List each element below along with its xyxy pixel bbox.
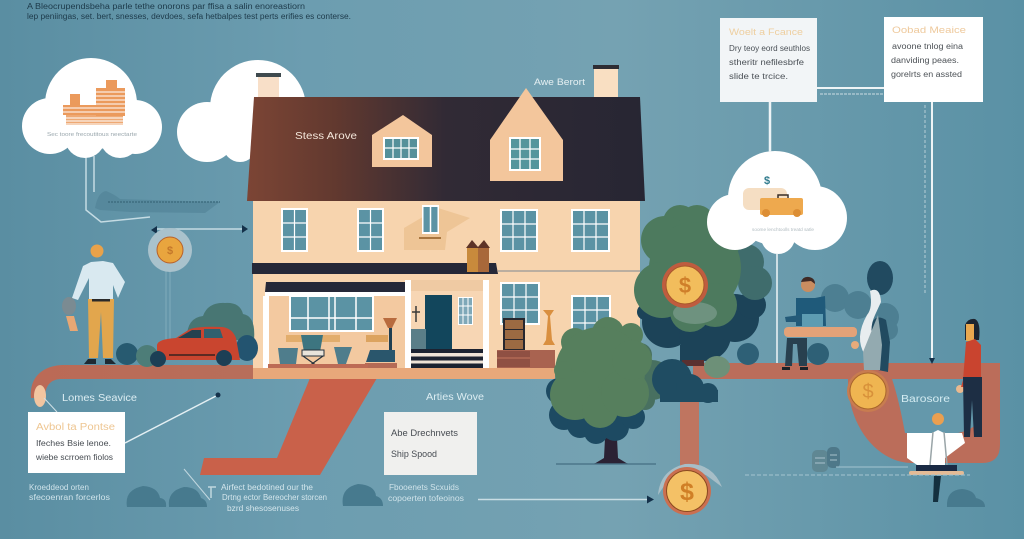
- trousers: [88, 299, 114, 358]
- note: lower left: [29, 483, 110, 502]
- window: upper 5: [571, 209, 610, 252]
- coin: bottom: $: [680, 478, 694, 506]
- callout: top middle: [720, 18, 817, 102]
- header text: lep peniingas, set. bert, snesses, devdoes, sefa hetbalpes test perts erifies es conterse.: [27, 12, 351, 21]
- bushes: under cloud: [704, 343, 829, 378]
- chimney: right: [593, 65, 619, 107]
- note: lower left: Kroeddeod orten: [29, 483, 89, 492]
- arrowhead: down: [929, 358, 935, 364]
- arrow: callout to top right: [125, 392, 220, 443]
- dormer: small: [372, 115, 432, 167]
- porch awning: [265, 282, 406, 292]
- house base: [253, 368, 555, 379]
- callout: lower centre: Ship Spood: [391, 449, 437, 459]
- shrubs: left: [116, 335, 258, 367]
- icon: small stones: [812, 447, 840, 472]
- door: [411, 295, 452, 350]
- callout: top right: Oobad Meaice: [892, 25, 966, 36]
- coin: left: [148, 228, 192, 348]
- note: lower centre: [388, 483, 464, 503]
- cloud caption: Sec toore frecoutitous neectarte: [47, 132, 137, 138]
- callout: lower centre: Abe Drechnvets: [391, 428, 459, 438]
- coin: in tree: $: [679, 273, 691, 298]
- label: lower left: Lomes Seavice: [62, 392, 137, 404]
- porch roof: [252, 263, 498, 274]
- porch window: [289, 296, 374, 332]
- note: lower middle: Drtng ector Bereocher storcen: [222, 493, 327, 502]
- callout: top middle: Woelt a Fcance: [729, 27, 803, 37]
- cloud icon: bottom right: [947, 489, 985, 507]
- note: lower centre: copoerten tofeoinos: [388, 494, 464, 503]
- label: lower centre: Arties Wove: [426, 391, 484, 403]
- belt: [92, 299, 110, 302]
- header text: A Bleocrupendsbeha parle tethe onorons par ffisa a salin enoreastiorn: [27, 2, 305, 11]
- dollar label: $: [764, 175, 770, 187]
- person: seated man: [782, 277, 826, 370]
- coin: left: $: [167, 245, 173, 257]
- callout: top right: gorelrts en assted: [891, 70, 962, 79]
- arrow: coin to house: [151, 225, 248, 234]
- porch posts: [263, 280, 489, 368]
- cloud: behind house: [177, 60, 306, 162]
- roof: [247, 97, 645, 201]
- window: upper 2: [357, 208, 384, 252]
- callout: lower left: [28, 412, 125, 473]
- porch furniture: [268, 318, 397, 368]
- callout: lower left: wiebe scrroem fiolos: [35, 452, 113, 462]
- callout: top middle: Dry teoy eord seuthlos: [729, 44, 810, 53]
- vertical path: [680, 400, 699, 466]
- person: man at desk: [907, 413, 965, 502]
- head: [90, 244, 104, 258]
- door side window: [458, 297, 473, 325]
- window: upper 4: [500, 209, 538, 252]
- shirt: [72, 261, 125, 300]
- diagonal orange path: [200, 378, 377, 475]
- pointer: small: [184, 469, 216, 500]
- cloud caption: soome lenchtoolls treatd satle: [752, 227, 815, 232]
- note: lower centre: Fbooenets Scxuids: [389, 483, 459, 492]
- cloud: suitcase: [707, 151, 847, 254]
- note: lower middle: bzrd shesosenuses: [227, 504, 299, 513]
- vase: [543, 310, 555, 345]
- tree: back: [634, 205, 772, 366]
- coin: in tree: [662, 262, 708, 308]
- arrow: bottom to coin: [478, 496, 654, 504]
- bushes: behind figure: [821, 284, 899, 340]
- label: right path: Barosore: [901, 394, 951, 405]
- tree: front: [546, 317, 672, 464]
- connector: small to box: [44, 398, 57, 412]
- callout: top right: [884, 17, 983, 102]
- callout: top middle: stheritr nefilesbrfe: [729, 58, 805, 67]
- shoes: [84, 359, 116, 364]
- person: man left: [62, 244, 125, 364]
- chimney pots: [466, 240, 490, 272]
- wall: [253, 201, 640, 369]
- window: upper 1: [281, 208, 308, 252]
- roof label: peak: Awe Berort: [534, 77, 585, 88]
- connectors: callouts: [770, 88, 932, 363]
- note: lower middle: Airfect bedotined our the: [221, 483, 313, 492]
- ground path: left: [31, 365, 255, 407]
- dormer: large: [490, 88, 563, 181]
- held bag: [62, 297, 78, 331]
- bush: behind car: [187, 303, 254, 340]
- ground path: right: [693, 363, 1000, 463]
- callout: lower left: Ifeches Bsie lenoe.: [36, 438, 111, 448]
- window: lower right: [500, 282, 540, 325]
- coin: bottom: [663, 467, 711, 515]
- callout: top middle: slide te trcice.: [729, 72, 788, 81]
- table: [784, 327, 857, 337]
- header text: [27, 2, 351, 21]
- note: lower left: sfecoenran forcerlos: [29, 493, 110, 502]
- figure: white abstract: [851, 261, 893, 372]
- connector lines: left cloud to coin: [86, 156, 150, 222]
- callout: lower left: Avbol ta Pontse: [36, 422, 115, 433]
- cloud icon: bottom centre: [343, 484, 383, 506]
- note: lower middle: [221, 483, 327, 513]
- steps: [411, 349, 483, 368]
- brick steps: [497, 350, 555, 369]
- cloud icons: bottom left: [127, 486, 207, 507]
- coin: on path: [847, 370, 889, 412]
- window: lower far right: [571, 295, 611, 340]
- callout: top right: danviding peaes.: [891, 56, 959, 65]
- dresser: [503, 318, 525, 351]
- icon: suitcase: [743, 188, 803, 217]
- smudge behind connector: [95, 191, 220, 213]
- dashed lines: bottom right: [745, 467, 970, 475]
- callout: lower centre: [384, 412, 477, 475]
- chimney: left: [256, 73, 281, 109]
- arch behind coin: [658, 464, 722, 495]
- cloud: left with house icon: [22, 58, 162, 158]
- porch interior: [269, 280, 483, 368]
- icon: striped house: [63, 80, 125, 125]
- person: woman: [956, 319, 982, 437]
- car: [150, 327, 240, 367]
- house: [247, 65, 645, 379]
- window: upper small: [419, 205, 441, 239]
- wall patch: [404, 208, 470, 250]
- roof label: Stess Arove: [295, 131, 358, 142]
- coin: on path: $: [862, 381, 874, 403]
- callout: top right: avoone tnlog eina: [892, 42, 964, 51]
- bush: dark at path: [652, 359, 718, 403]
- opening in ground path: [892, 379, 982, 433]
